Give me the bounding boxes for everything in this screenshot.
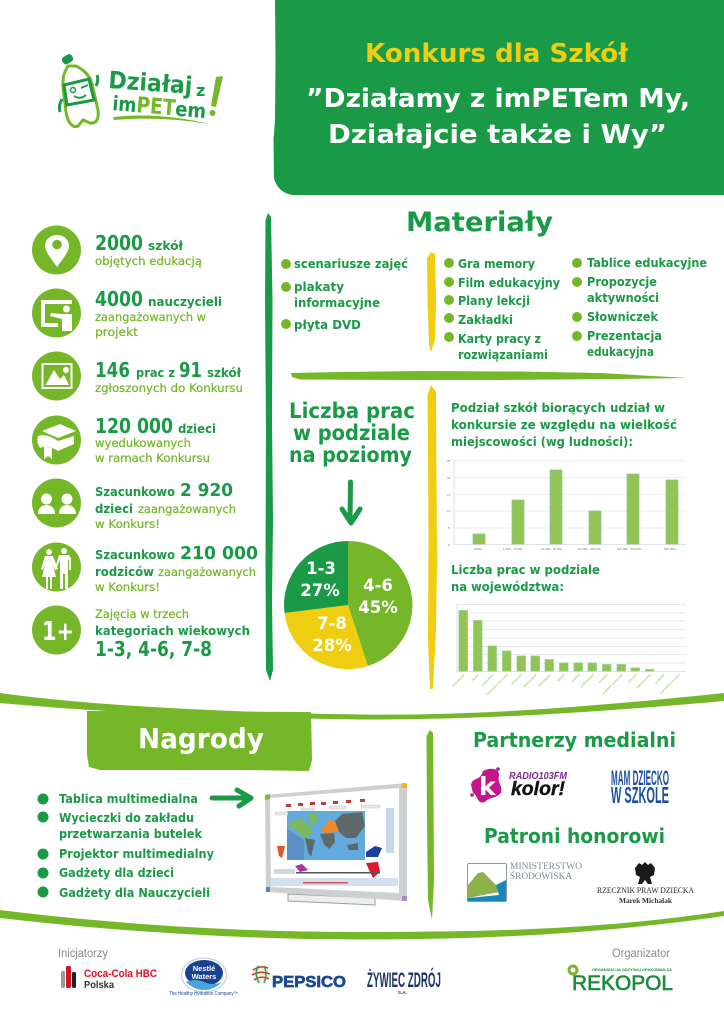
stat: children educated: w ramach Konkursu (95, 451, 210, 465)
materials list column 1: plakaty (294, 279, 344, 294)
logo: Rekopol: ORGANIZACJA ODZYSKU OPAKOWAŃ SA (592, 967, 673, 972)
stat: children educated: dzieci (178, 421, 216, 436)
label: Organizator: Organizator (612, 948, 670, 960)
stat: parents: rodziców (95, 564, 154, 579)
bar chart: works by voivodeship: pomorskie (510, 673, 523, 685)
bar chart: schools by town size (447, 459, 686, 551)
header banner (274, 0, 724, 195)
prize list (38, 791, 214, 900)
stat: teachers: 4000 (95, 287, 143, 311)
stat: teachers: projekt (95, 325, 139, 339)
prize list: Gadżety dla Nauczycieli (59, 885, 210, 900)
stat: parents (32, 542, 258, 594)
panel: Nagrody heading: Nagrody (138, 722, 264, 755)
icon: 1+: 1+ (42, 617, 74, 647)
materials list column 3: Tablice edukacyjne (587, 255, 707, 270)
materials list column 3: edukacyjna (587, 344, 654, 359)
stat: parents: zaangażowanych (158, 565, 256, 579)
prize list: Projektor multimedialny (59, 846, 214, 861)
materials list column 2: Gra memory (458, 256, 535, 271)
stat: children educated (32, 414, 216, 465)
materials list column 3 (572, 255, 707, 359)
icon: graduation cap (32, 416, 81, 464)
bar chart: schools by town size: 0 (448, 543, 450, 547)
bar chart: works by voivodeship: opolskie (570, 673, 581, 683)
prize list: Wycieczki do zakładu (59, 810, 194, 825)
bar chart: works by voivodeship: wielkopolskie (522, 673, 538, 688)
logo: Radio Kolor: kolor! (511, 779, 565, 800)
materials list column 3: aktywności (587, 290, 659, 305)
stat: schools: 2000 (95, 231, 143, 255)
bar chart: works by voivodeship: małopolskie (481, 673, 495, 687)
stat: teachers: zaangażowanych w (95, 310, 206, 324)
heading: chart by town size (451, 400, 677, 449)
bar chart: schools by town size: 50 000 - 100 000 (578, 547, 601, 551)
arrow: down to pie (342, 482, 360, 523)
materials list column 1: informacyjne (294, 295, 380, 310)
stat: children engaged (32, 478, 236, 531)
bar chart: works by voivodeship: lubuskie (627, 673, 638, 683)
bar chart: works by voivodeship: warmińsko-mazurskie (485, 673, 509, 696)
prize list: Gadżety dla dzieci (59, 865, 174, 880)
logo: Nestlé Waters: Waters (192, 972, 216, 981)
bar chart: schools by town size: 10 000 - 50 000 (541, 547, 562, 551)
materials list column 3: Słowniczek (587, 309, 659, 324)
banner subtitle: ”Działamy z imPETem My, (306, 84, 690, 114)
stat: submissions: zgłoszonych do Konkursu (95, 381, 243, 395)
stat: schools (32, 226, 202, 274)
bar chart: works by voivodeship: mazowieckie (451, 673, 466, 688)
pie chart: levels: 28% (312, 636, 352, 655)
bar chart: schools by town size: 500 000+ (664, 547, 677, 551)
logo: Nestlé Waters (169, 958, 238, 997)
logo: Radio Kolor (470, 767, 567, 803)
logo: Nestlé Waters: Nestlé (193, 964, 215, 973)
materials list column 2: Karty pracy z (458, 331, 541, 346)
banner subtitle (306, 84, 690, 150)
icon: two people (32, 478, 81, 528)
materials list column 1 (281, 256, 408, 332)
bar chart: schools by town size: 1 000 - 10 000 (503, 547, 523, 551)
divider: green vertical (265, 213, 273, 681)
logo: Coca-Cola HBC Polska: Polska (84, 979, 114, 991)
bar chart: works by voivodeship: śląskie (470, 673, 480, 682)
stat: parents: 210 000 (180, 543, 258, 564)
stat: children engaged: Szacunkowo (95, 484, 175, 499)
logo: Działaj z imPETem (59, 53, 223, 127)
icon: 1+ (32, 606, 81, 654)
divider: yellow upper (427, 252, 436, 352)
bar chart: schools by town size: 10 (447, 509, 451, 513)
logo: Rzecznik Praw Dziecka (597, 862, 695, 905)
stat: submissions (32, 352, 243, 400)
stat: children educated: wyedukowanych (95, 436, 191, 450)
stat: submissions: szkół (207, 365, 241, 380)
stat: children engaged: dzieci (95, 501, 133, 516)
logo: PepsiCo (252, 965, 346, 991)
logo: Działaj z imPETem: im (112, 91, 138, 117)
materials list column 1: płyta DVD (294, 317, 361, 332)
bar chart: works by voivodeship: kujawsko-pomorskie (602, 673, 624, 695)
heading: chart by town size: konkursie ze względu na wielkość (451, 417, 677, 432)
heading: Patroni honorowi: Patroni honorowi (484, 824, 665, 848)
pie chart: levels: 7-8 (317, 614, 347, 633)
heading: Liczba prac w podziale na poziomy (289, 399, 415, 467)
stat: parents: w Konkurs! (95, 580, 160, 594)
heading: Liczba prac w podziale na poziomy: w podziale (293, 421, 410, 445)
stat: children engaged: zaangażowanych (138, 502, 236, 516)
stat: schools: szkół (148, 238, 183, 253)
infographic: ŻYWIEC ZDRÓJ (367, 968, 441, 992)
stat: teachers: nauczycieli (148, 294, 222, 309)
stat: age categories: 1-3, 4-6, 7-8 (95, 637, 212, 661)
logo: Ministerstwo Środowiska: MINISTERSTWO (510, 862, 582, 872)
logo: Rekopol: REKOPOL (572, 972, 673, 995)
logo: Żywiec Zdrój (367, 968, 441, 995)
icon: couple (32, 542, 81, 592)
banner title: Konkurs dla Szkół (365, 39, 629, 69)
logo: Ministerstwo Środowiska: ŚRODOWISKA (510, 870, 572, 882)
materials list column 3: Propozycje (587, 274, 657, 289)
stat: age categories (32, 606, 250, 661)
label: Inicjatorzy: Inicjatorzy (58, 948, 108, 960)
band: lower lime curve (0, 910, 724, 940)
logo: Działaj z imPETem: em (174, 97, 207, 123)
map (287, 811, 365, 860)
arrow: to whiteboard (212, 790, 251, 806)
bar chart: works by voivodeship: świętokrzyskie (635, 673, 652, 689)
panel: Nagrody heading (87, 711, 312, 771)
icon: teacher at board (32, 288, 81, 338)
divider: lime horizontal (291, 371, 688, 380)
bar chart: works by voivodeship: zachodniopomorskie (658, 673, 681, 695)
stat: age categories: Zajęcia w trzech (95, 607, 189, 621)
bar chart: works by voivodeship: dolnośląskie (537, 673, 552, 687)
banner subtitle: Działajcie także i Wy” (328, 120, 667, 150)
materials list column 2: Zakładki (458, 312, 513, 327)
bar chart: schools by town size: 5 (448, 526, 450, 530)
divider: lime vertical right (426, 730, 434, 920)
stat: submissions: 146 (95, 358, 130, 382)
band: upper lime curve (0, 693, 724, 720)
icon: map pin (32, 226, 81, 274)
materials list column 2: rozwiązaniami (458, 347, 548, 362)
logo: Rzecznik Praw Dziecka: RZECZNIK PRAW DZIECKA (597, 885, 695, 895)
bar chart: works by voivodeship: łódzkie (556, 673, 566, 682)
pie chart: levels: 4-6 (363, 576, 393, 595)
heading: chart by town size: Podział szkół biorących udział w (451, 400, 665, 415)
materials list column 2: Film edukacyjny (458, 275, 560, 290)
logo: Działaj z imPETem: z (196, 81, 205, 100)
pie chart: levels: 45% (358, 598, 398, 617)
stat: age categories: kategoriach wiekowych (95, 623, 250, 638)
icon: picture (32, 352, 81, 400)
bar chart: works by voivodeship: podkarpackie (579, 673, 595, 688)
logo: Działaj z imPETem: PET (135, 93, 176, 121)
logo: Żywiec Zdrój: S.A. (398, 990, 407, 995)
heading: Partnerzy medialni: Partnerzy medialni (473, 728, 676, 752)
logo: Działaj z imPETem: Działaj (108, 66, 193, 100)
heading: chart by town size: miejscowości (wg ludności): (451, 434, 633, 449)
divider: yellow lower (428, 385, 437, 689)
materials list column 2: Plany lekcji (458, 293, 530, 308)
heading: Liczba prac w podziale na poziomy: Liczba prac (289, 399, 415, 423)
bar chart: schools by town size: 20 (447, 476, 451, 480)
logo: Nestlé Waters: The Healthy Hydration Company™ (169, 991, 238, 997)
prize list: Tablica multimedialna (59, 791, 198, 806)
logo: Rzecznik Praw Dziecka: Marek Michalak (619, 896, 673, 905)
pie chart: levels (284, 541, 412, 669)
stat: parents: Szacunkowo (95, 547, 175, 562)
stat: submissions: prac z (136, 365, 175, 380)
bar chart: schools by town size: 2000+ (474, 547, 483, 551)
materials list column 1: scenariusze zajęć (294, 256, 408, 271)
stat: children engaged: 2 920 (180, 480, 233, 501)
bar chart: schools by town size: 25 (447, 459, 451, 463)
logo: Radio Kolor: k (479, 772, 497, 801)
bar chart: works by voivodeship (451, 604, 686, 696)
logo: Radio Kolor: RADIO103FM (509, 770, 567, 782)
stat: teachers (32, 287, 222, 339)
stat: submissions: 91 (179, 358, 202, 382)
logo: Mam dziecko w szkole (611, 767, 669, 808)
logo: Ministerstwo Środowiska (468, 862, 582, 902)
heading: Materiały: Materiały (406, 207, 553, 238)
bar chart: works by voivodeship: lubelskie (598, 673, 609, 684)
stat: children engaged: w Konkurs! (95, 517, 160, 531)
prize list: przetwarzania butelek (59, 826, 203, 841)
pie chart: levels: 27% (300, 581, 340, 600)
pie chart: levels: 1-3 (306, 559, 336, 578)
logo: Coca-Cola HBC Polska: Coca-Cola HBC (84, 968, 157, 980)
bar chart: schools by town size: 100 000 - 500 000 (617, 547, 642, 551)
bar chart: works by voivodeship: podlaskie (654, 673, 666, 685)
whiteboard image (265, 783, 407, 905)
heading: Liczba prac w podziale na poziomy: na poziomy (289, 443, 412, 467)
materials list column 2 (444, 256, 560, 362)
heading: chart by voivodeship (451, 562, 600, 594)
heading: chart by voivodeship: na województwa: (451, 579, 564, 594)
stat: children educated: 120 000 (95, 414, 173, 438)
stat: schools: objętych edukacją (95, 254, 202, 268)
materials list column 3: Prezentacja (587, 328, 662, 343)
logo: PepsiCo: PEPSICO (272, 974, 346, 991)
heading: chart by voivodeship: Liczba prac w podziale (451, 562, 600, 577)
bar chart: schools by town size: 15 (447, 493, 451, 497)
logo: Coca-Cola HBC Polska (61, 966, 157, 991)
